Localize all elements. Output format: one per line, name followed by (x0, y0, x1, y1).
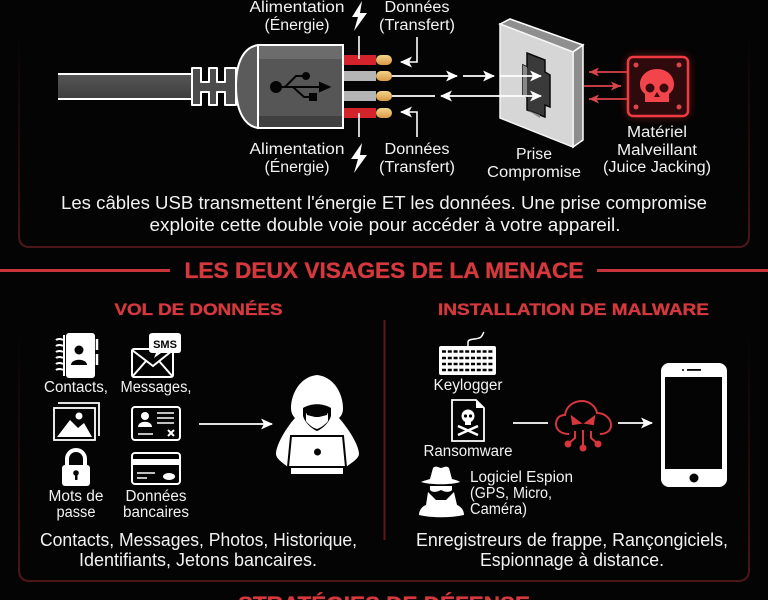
label: malicious hardware: Malveillant (617, 142, 698, 159)
icon: lightning top (352, 1, 367, 31)
pins (344, 55, 392, 118)
label: passwords (48, 488, 104, 521)
label: passwords: Mots de (48, 488, 104, 505)
label: passwords: passe (56, 504, 96, 521)
icon: lock (62, 450, 90, 486)
label: power top (250, 0, 344, 34)
icon: skull (640, 69, 674, 102)
text: explanation (61, 192, 707, 235)
icon: malicious hardware (628, 57, 688, 116)
arrow: to cloud (513, 422, 548, 424)
arrow: to hacker (199, 423, 272, 425)
label: malicious hardware: Matériel (627, 124, 687, 141)
label: contacts: Contacts, (44, 379, 108, 396)
panel: two faces (19, 330, 749, 581)
label: data bottom: Données (384, 141, 450, 158)
label: socket: Compromise (487, 164, 581, 181)
text: malware summary (416, 529, 728, 570)
label: malicious hardware (603, 124, 711, 176)
icon: USB symbol (271, 73, 329, 100)
label: ransomware: Ransomware (424, 443, 512, 460)
label: keylogger: Keylogger (434, 377, 502, 394)
USB cable (58, 45, 392, 128)
label: bank data: Données (126, 488, 187, 505)
icon: sms envelope: SMS (153, 339, 177, 351)
icon: id card (132, 407, 180, 440)
label: socket (487, 146, 581, 181)
icon: lightning bottom (351, 143, 367, 173)
heading: data theft: VOL DE DONNÉES (114, 300, 282, 319)
text: data theft summary: Identifiants, Jetons bancaires. (79, 549, 317, 570)
label: spyware: (GPS, Micro, (470, 485, 552, 502)
label: bank data (123, 488, 189, 521)
text: data theft summary (40, 529, 357, 570)
heading: two faces: LES DEUX VISAGES DE LA MENACE (184, 258, 584, 283)
icon: malicious cloud (556, 401, 611, 450)
icon: contacts book (56, 333, 97, 378)
label: socket: Prise (516, 146, 552, 163)
callout lines and arrows (359, 36, 417, 137)
label: power bottom (250, 141, 344, 176)
icon: keyboard (439, 332, 496, 375)
label: data bottom: (Transfert) (379, 159, 455, 176)
panel: how it works (19, 30, 749, 247)
data flow arrows (392, 76, 494, 96)
label: data top: (Transfert) (379, 17, 455, 34)
text: data theft summary: Contacts, Messages, Photos, Historique, (40, 529, 357, 550)
label: data top (379, 0, 455, 34)
icon: smartphone (661, 363, 727, 487)
label: power bottom: Alimentation (250, 141, 344, 158)
label: messages: Messages, (120, 379, 192, 396)
text: malware summary: Espionnage à distance. (480, 549, 664, 570)
label: bank data: bancaires (123, 504, 189, 521)
icon: spy (419, 467, 464, 517)
text: explanation: exploite cette double voie pour accéder à votre appareil. (150, 214, 620, 235)
icon: bank card (132, 453, 180, 484)
divider (384, 320, 386, 540)
text: explanation: Les câbles USB transmettent l'énergie ET les données. Une prise compromise (61, 192, 707, 213)
icon: ransomware file (452, 400, 484, 441)
label: spyware: Caméra) (470, 501, 527, 518)
arrow: to phone (618, 422, 652, 424)
label: malicious hardware: (Juice Jacking) (603, 159, 711, 176)
section rules (0, 269, 768, 272)
heading: malware: INSTALLATION DE MALWARE (438, 300, 709, 319)
label: data bottom (379, 141, 455, 176)
icon: photos (54, 403, 99, 440)
text: malware summary: Enregistreurs de frappe, Rançongiciels, (416, 529, 728, 550)
label: power top: (Énergie) (264, 17, 330, 34)
red arrows (584, 72, 627, 99)
compromised socket (500, 19, 583, 147)
label: spyware: Logiciel Espion (470, 469, 573, 486)
socket arrows overlay (441, 76, 541, 96)
icon: hacker (276, 375, 359, 474)
label: spyware (470, 469, 573, 518)
icon: sms envelope (132, 333, 181, 377)
label: power bottom: (Énergie) (264, 159, 330, 176)
